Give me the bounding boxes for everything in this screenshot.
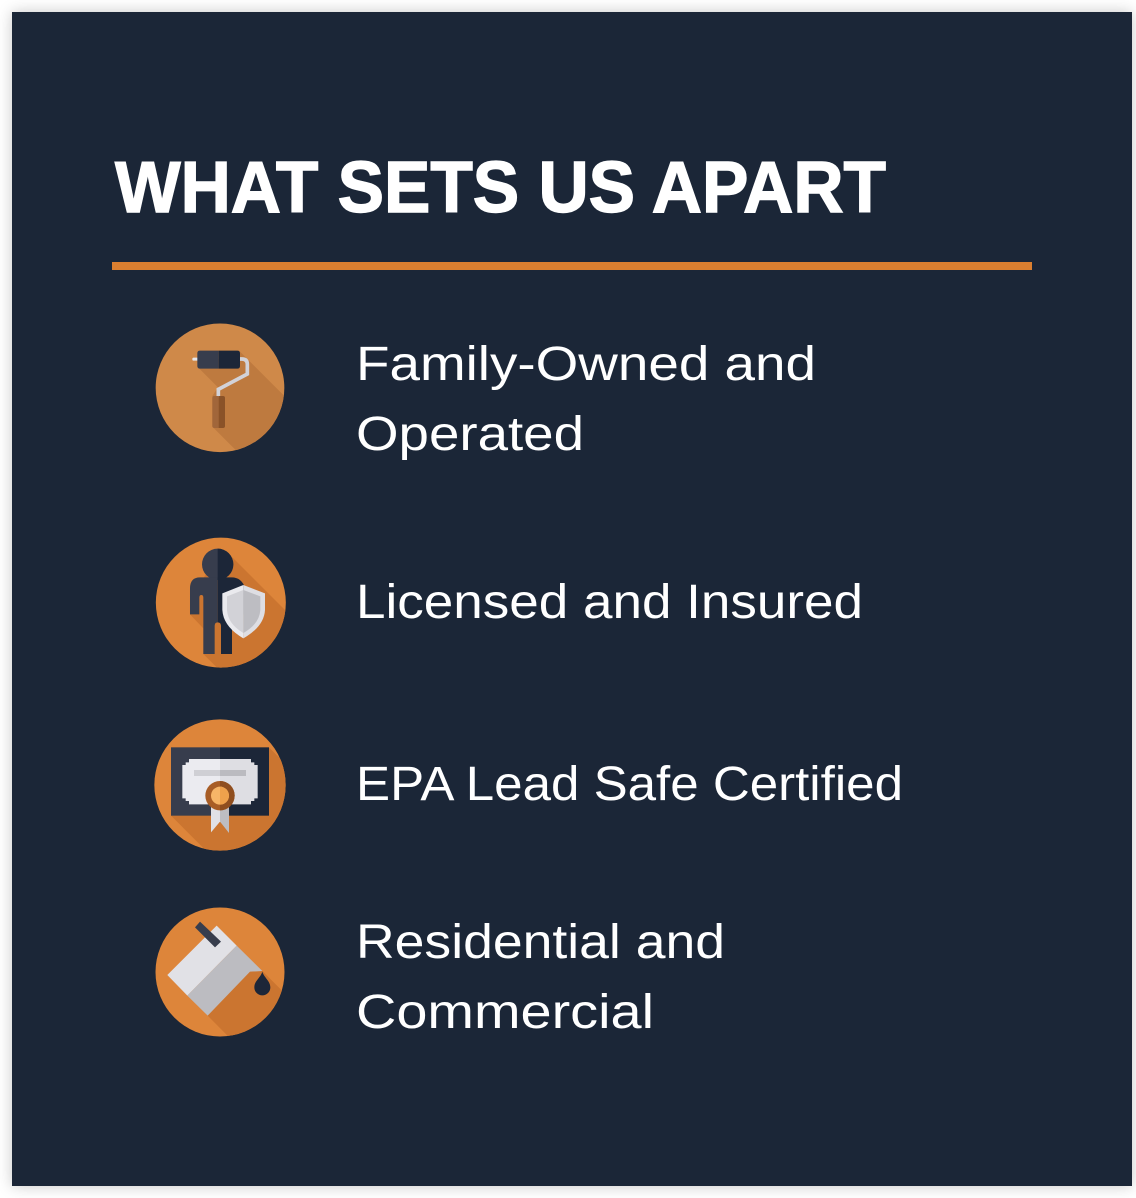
text: family-owned and operated: Family-Owned and [356,338,816,391]
heading underline [112,262,1032,270]
text: EPA lead safe certified: EPA Lead Safe Certified [356,758,903,811]
text: family-owned and operated: Operated [356,408,584,461]
text: residential and commercial: Commercial [356,986,654,1039]
icon: paint roller [156,324,284,452]
text: licensed and insured: Licensed and Insured [356,576,863,629]
text: residential and commercial [356,916,725,1039]
icon: certificate [154,719,286,851]
text: residential and commercial: Residential and [356,916,725,969]
icon: person with shield [156,538,286,668]
icon: paint bucket [156,908,284,1036]
title: WHAT SETS US APART [115,148,886,228]
text: family-owned and operated [356,338,816,461]
